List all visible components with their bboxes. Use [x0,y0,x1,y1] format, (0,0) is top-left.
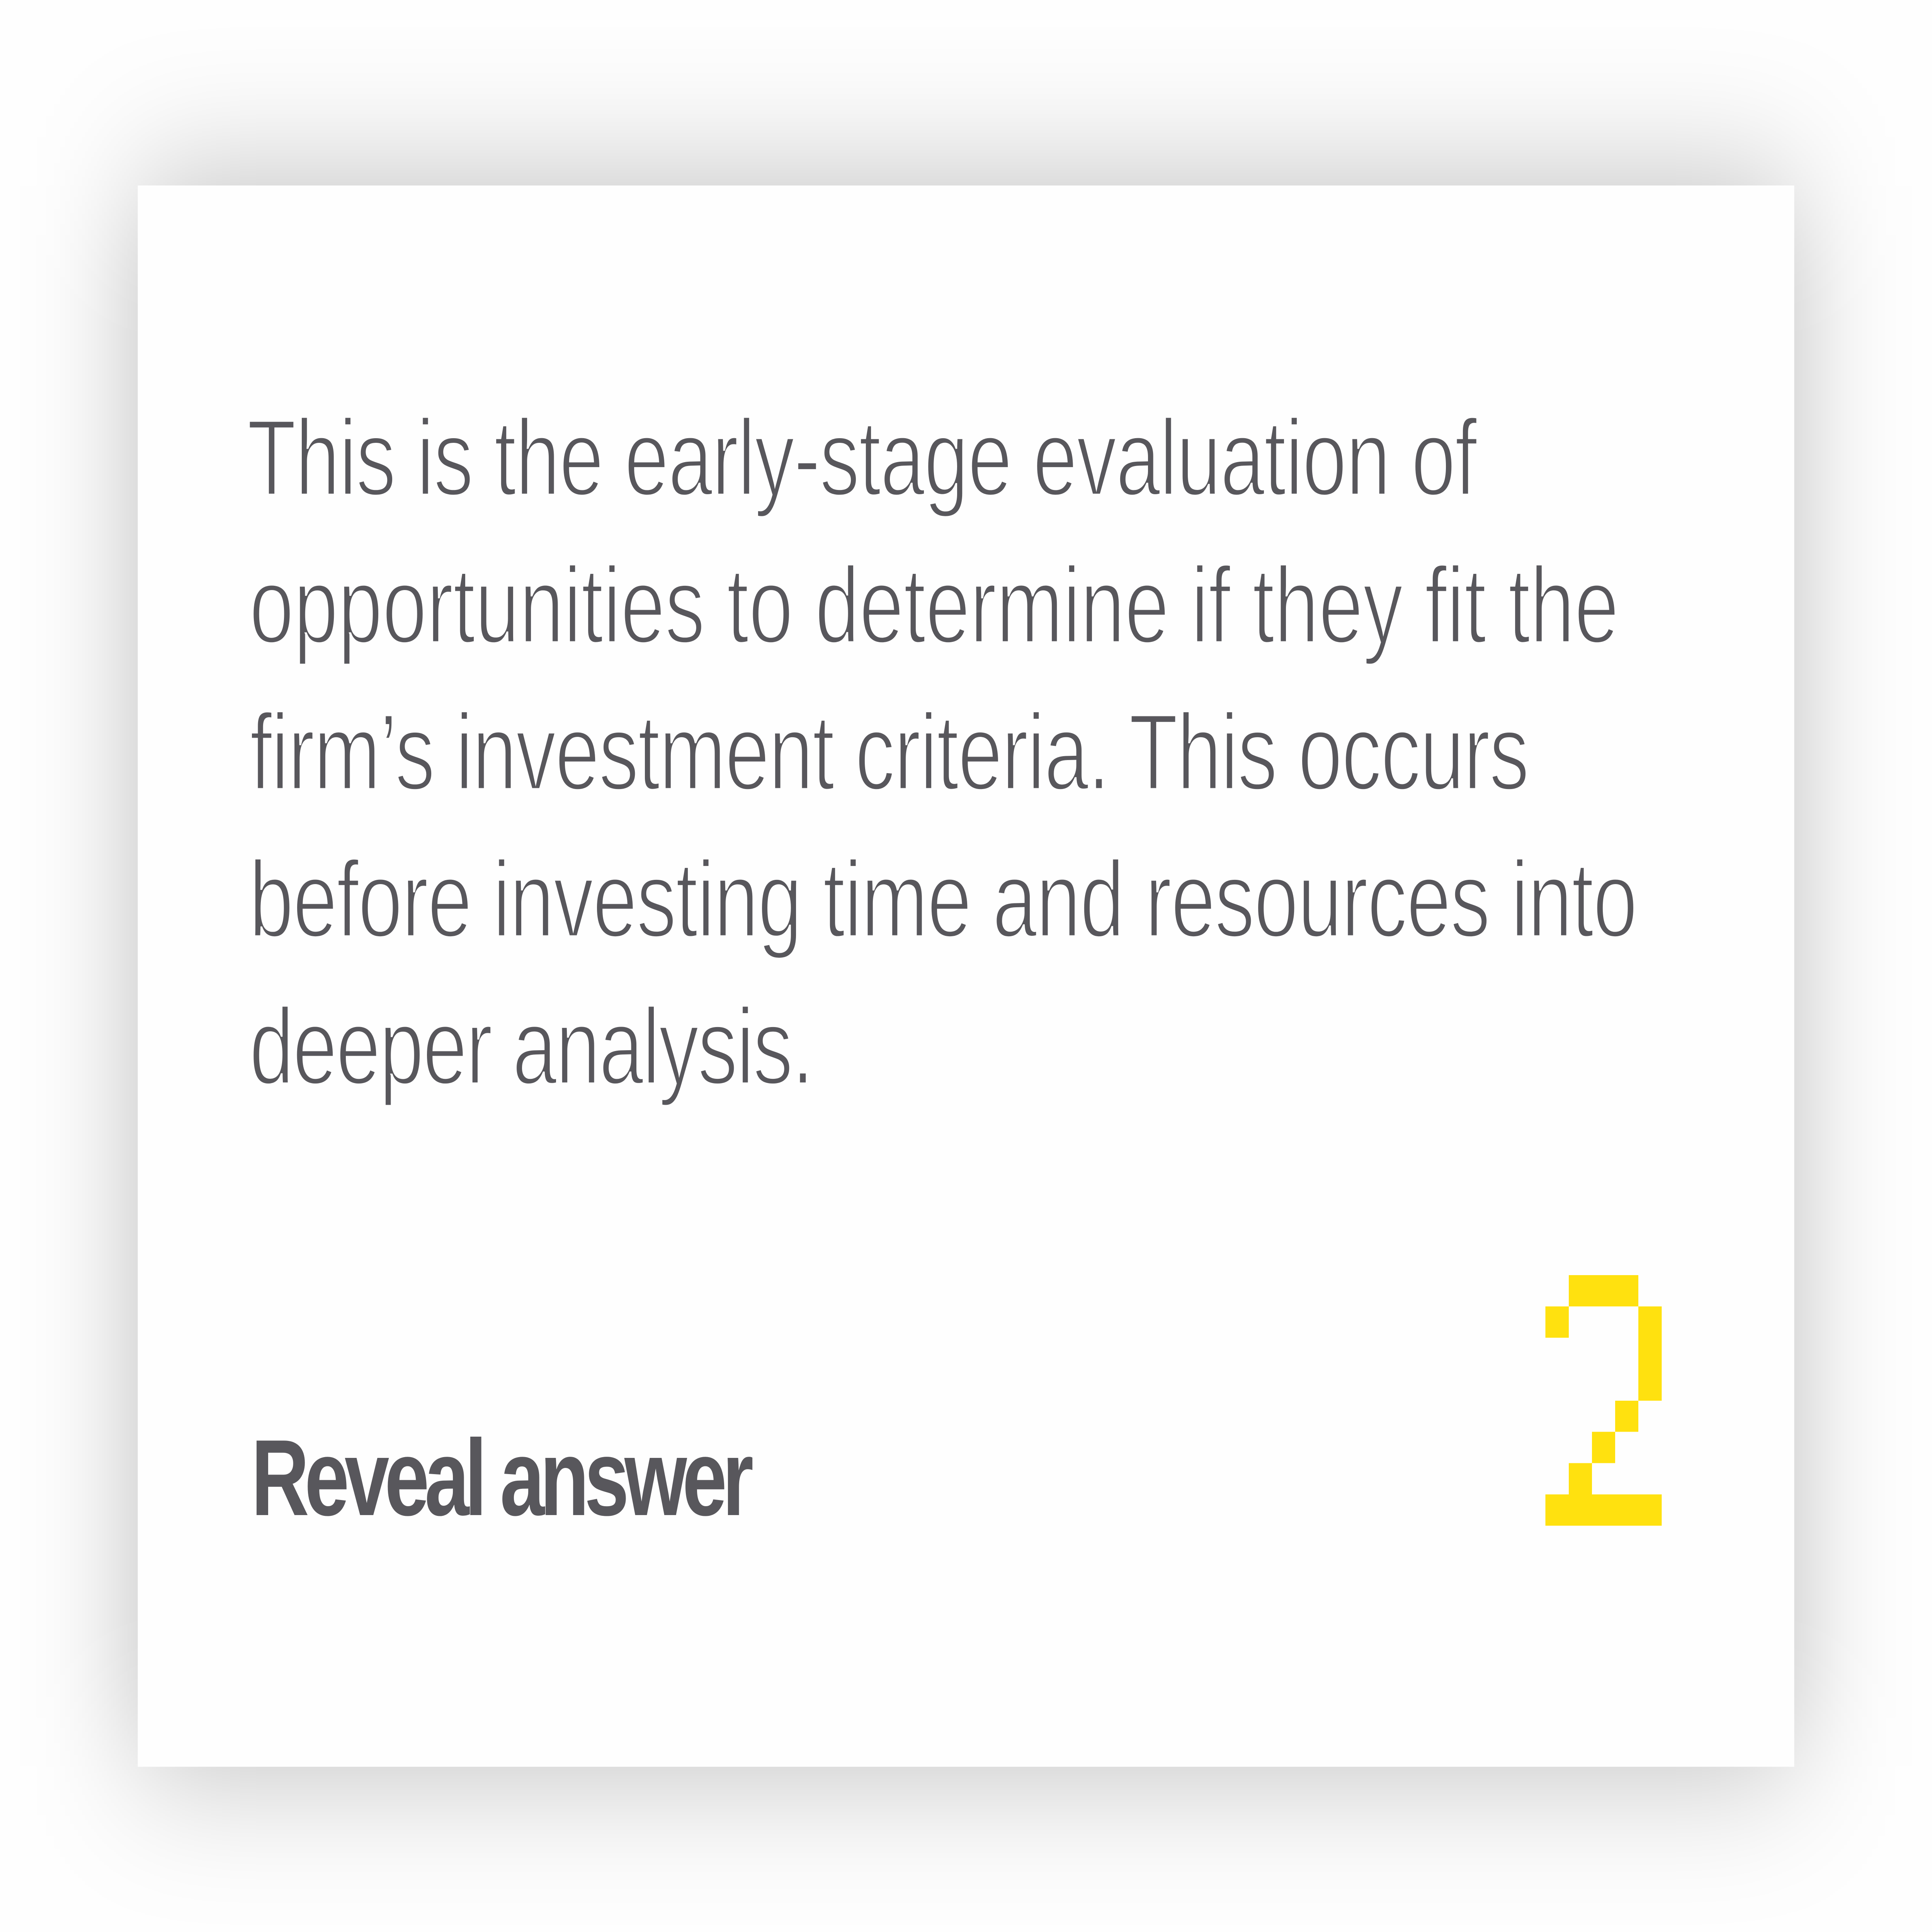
text block: question description: This is the early-stage evaluation of [247,398,1477,518]
text block: question description [247,398,1638,1107]
text block: question description: before investing time and resources into [249,839,1638,960]
button label: Reveal answer: Reveal answer [251,1418,753,1538]
text block: question description: opportunities to determine if they fit the [249,545,1619,666]
text block: question description: firm’s investment criteria. This occurs [250,692,1529,813]
icon: yellow pixel numeral 2 [1546,1275,1662,1526]
text block: question description: deeper analysis. [249,986,814,1107]
panel: white question card with soft shadow [138,185,1794,1767]
